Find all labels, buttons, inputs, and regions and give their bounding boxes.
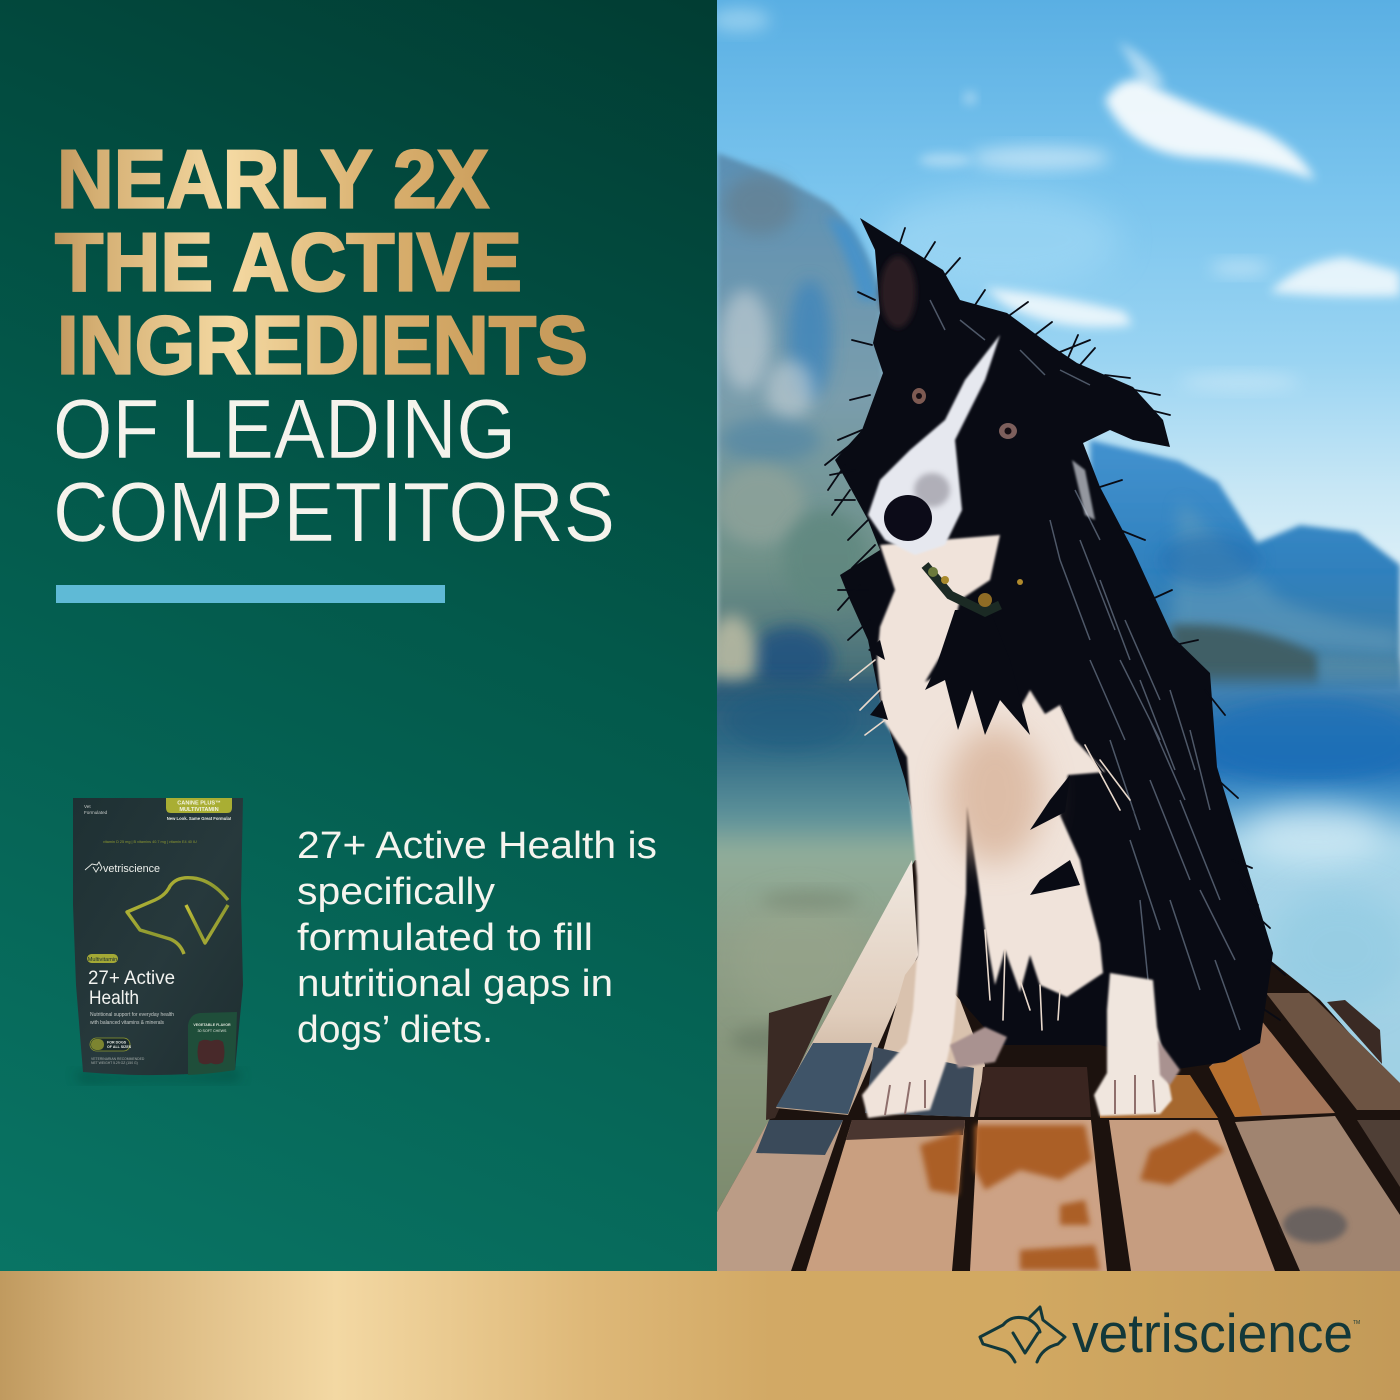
dog eyes	[912, 388, 1017, 439]
product image: supplement pouch	[73, 798, 243, 1082]
photo lake	[717, 668, 1400, 1212]
text block: product description: nutritional gaps in	[297, 963, 613, 1005]
footer band	[0, 1271, 1400, 1400]
text block: product description: formulated to fill	[297, 917, 593, 959]
dog black chest spikes	[868, 610, 1140, 895]
pouch small text: vitamin D 25 mg | B vitamins 40.7 mg | vitamin E4 40 IU	[103, 840, 197, 844]
heading: gold headline	[55, 132, 588, 392]
pouch net weight text: VETERINARIAN RECOMMENDED	[91, 1057, 145, 1061]
dog chest tint	[947, 727, 1043, 863]
heading: gold headline: NEARLY 2X	[57, 132, 489, 226]
photo dog body	[825, 218, 1285, 1118]
dock posts	[766, 995, 1382, 1120]
dock upper planks	[776, 860, 1400, 1118]
dock lower planks	[717, 1116, 1400, 1271]
dog face blaze and muzzle	[868, 335, 1000, 555]
heading: white subhead: OF LEADING	[53, 382, 516, 476]
pouch dog mark	[127, 878, 228, 954]
pouch dog size badge	[90, 1038, 132, 1051]
pouch green corner	[188, 1012, 237, 1075]
pouch product name: 27+ Active	[88, 968, 175, 989]
panel: green background	[0, 0, 717, 1271]
pouch small text: Vet	[84, 804, 91, 809]
pouch brand logo	[85, 862, 160, 875]
pouch small text	[84, 804, 231, 844]
text block: product description	[297, 825, 657, 1051]
dog right front leg	[1094, 973, 1172, 1116]
photo: border collie on a dock	[690, 0, 1400, 1320]
dock shaded patch	[1283, 1207, 1347, 1243]
pouch top label	[166, 798, 232, 813]
dog inner ear	[880, 256, 916, 328]
pouch chew illustration: 30 SOFT CHEWS	[198, 1029, 227, 1033]
pouch description	[89, 1012, 174, 1026]
pouch top label: CANINE PLUS™	[177, 800, 221, 806]
pouch top label: MULTIVITAMIN	[179, 807, 219, 813]
pouch net weight text: NET WEIGHT 5.29 OZ (150 G)	[91, 1061, 138, 1065]
dog white chest and left leg	[862, 535, 1105, 1118]
pouch description: Nutritional support for everyday health	[90, 1012, 174, 1018]
dog paw toes	[885, 1075, 1155, 1115]
footer logo: vetriscience	[980, 1302, 1360, 1364]
dock wet stains	[920, 1125, 1225, 1270]
text block: product description: 27+ Active Health is	[297, 825, 657, 867]
text block: product description: dogs’ diets.	[297, 1009, 493, 1051]
heading: gold headline: THE ACTIVE	[55, 216, 522, 308]
dog muzzle mottling	[914, 473, 950, 507]
logo icon: dog and cat mark	[980, 1307, 1065, 1362]
dog collar	[925, 565, 1023, 612]
photo clouds	[919, 42, 1400, 391]
logo wordmark: vetriscience	[1072, 1302, 1353, 1364]
pouch small text: Formulated	[84, 810, 108, 815]
heading: gold headline: INGREDIENTS	[57, 298, 588, 392]
dog fur spikes	[825, 228, 1285, 1020]
heading: white subhead: COMPETITORS	[53, 465, 615, 559]
pouch chew illustration	[193, 1023, 231, 1064]
dog back paws	[950, 1027, 1180, 1085]
pouch product name: Health	[89, 988, 139, 1009]
photo right mountains	[1090, 440, 1400, 695]
photo dock	[717, 860, 1400, 1271]
photo left mountain	[717, 152, 883, 692]
pouch category pill: Multivitamin	[88, 957, 117, 963]
pouch product name	[88, 968, 175, 1009]
pouch brand logo: vetriscience	[103, 863, 160, 875]
logo trademark: TM	[1353, 1320, 1360, 1326]
dog white hair strands	[850, 660, 1130, 1030]
accent bar	[56, 585, 445, 603]
pouch chew illustration: VEGETABLE FLAVOR	[193, 1023, 231, 1027]
pouch dog size badge: FOR DOGS	[107, 1040, 127, 1044]
pouch net weight text	[91, 1057, 145, 1065]
dog neck white streak	[1072, 460, 1095, 520]
dog wet fur sheen	[930, 300, 1240, 1030]
dog black coat	[835, 218, 1273, 1070]
pouch small text: New Look. Same Great Formula!	[167, 816, 231, 821]
pouch category pill	[87, 954, 118, 963]
dog nose	[884, 495, 932, 541]
heading: white subhead	[53, 382, 615, 559]
text block: product description: specifically	[297, 871, 495, 913]
pouch dog size badge: OF ALL SIZES	[107, 1045, 132, 1049]
pouch description: with balanced vitamins & minerals	[89, 1020, 164, 1026]
photo sky	[710, 0, 1400, 700]
